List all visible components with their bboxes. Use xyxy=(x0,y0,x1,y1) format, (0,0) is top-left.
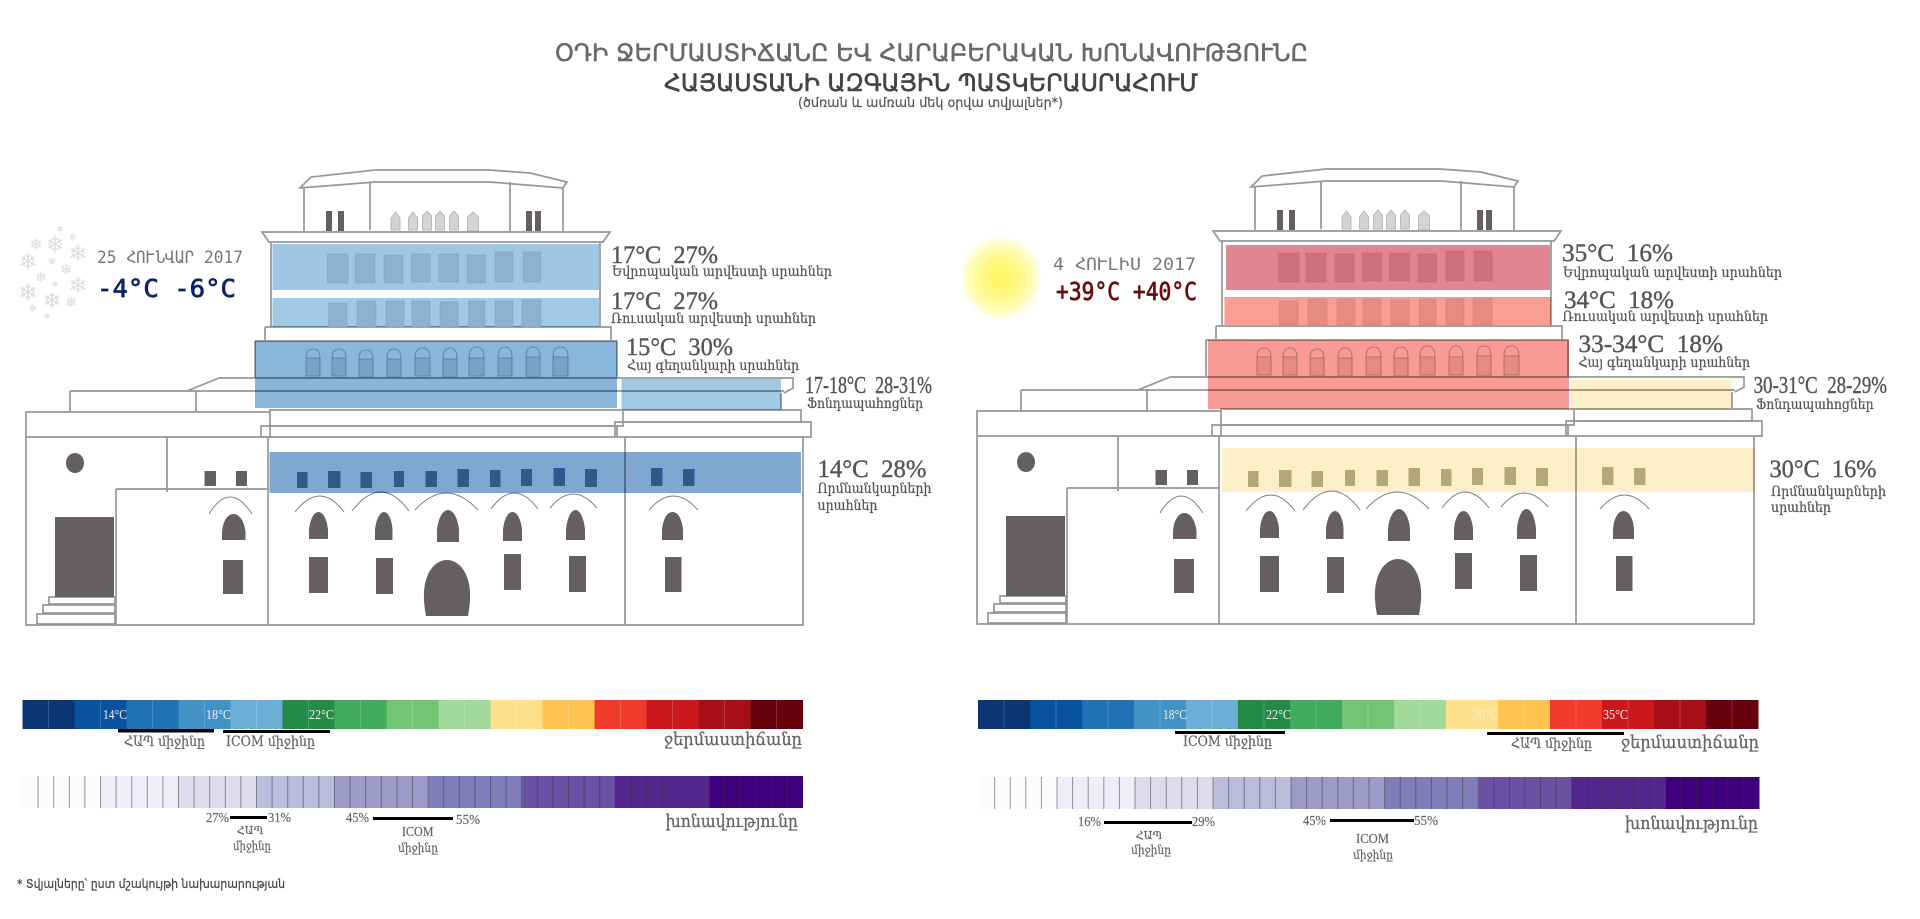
panel: summer temperature scale: 35°C xyxy=(1603,708,1628,723)
panel: summer humidity scale: 29% xyxy=(1192,815,1215,830)
windows: European art halls xyxy=(328,252,541,283)
windows: frescoes halls xyxy=(1248,467,1646,487)
label: frescoes: 30°C 16% xyxy=(1770,456,1876,483)
winter labels: Հայ գեղանկարի սրահներ xyxy=(627,358,799,374)
summer labels xyxy=(1562,240,1887,516)
scale tick labels: 14°C xyxy=(103,708,127,723)
title line 2: ՀԱՅԱՍՏԱՆԻ ԱԶԳԱՅԻՆ ՊԱՏԿԵՐԱՍՐԱՀՈՒՄ xyxy=(664,69,1198,97)
scale title: ջերմաստիճանը xyxy=(1621,732,1759,753)
windows: Russian art halls xyxy=(1280,298,1492,325)
panel: summer humidity scale xyxy=(979,777,1760,862)
panel: summer humidity scale: միջինը xyxy=(1353,848,1393,862)
panel: summer humidity scale: 55% xyxy=(1414,814,1438,829)
panel: summer temperature scale: 30°C xyxy=(1473,708,1498,723)
panel: winter humidity scale: միջինը xyxy=(233,839,271,853)
panel: winter temperature scale: 18°C xyxy=(206,708,231,723)
band: Russian art halls xyxy=(272,298,599,327)
summer labels: սրահներ xyxy=(1771,500,1831,516)
building facade outline xyxy=(26,170,811,625)
label: frescoes: 14°C 28% xyxy=(818,456,926,483)
panel: summer building xyxy=(977,169,1762,624)
band: European art halls xyxy=(1226,245,1550,290)
panel: winter temperature scale xyxy=(22,700,803,750)
windows: Russian art halls xyxy=(328,300,541,327)
panel: winter humidity scale: միջինը xyxy=(398,841,438,855)
label: European art: 35°C 16% xyxy=(1562,240,1673,267)
icon: snowflakes xyxy=(20,226,85,320)
range labels: ICOM միջինը xyxy=(1183,734,1272,750)
panel: summer temperature scale: 22°C xyxy=(1266,708,1291,723)
label: Armenian painting: 33-34°C 18% xyxy=(1578,331,1723,358)
label: Armenian painting: 15°C 30% xyxy=(626,334,733,361)
panel: winter temperature scale: ICOM միջինը xyxy=(226,734,315,750)
band: Russian art halls xyxy=(1224,297,1551,325)
summer labels: Եվրոպական արվեստի սրահներ xyxy=(1563,265,1782,281)
winter labels xyxy=(611,242,932,514)
subtitle: (ծմռան և ամռան մեկ օրվա տվյալներ*) xyxy=(798,95,1063,111)
label: Russian art: 17°C 27% xyxy=(611,288,718,315)
scale title: խոնավությունը xyxy=(1625,813,1758,834)
temperature colour bar xyxy=(978,700,1758,729)
band: storage xyxy=(1571,380,1732,409)
scale title: խոնավությունը xyxy=(666,811,798,832)
ICOM range: 45% xyxy=(346,811,369,826)
panel: summer humidity scale: ՀԱՊ xyxy=(1136,829,1163,842)
title line 1: ՕԴԻ ՋԵՐՄԱՍՏԻՃԱՆԸ ԵՎ ՀԱՐԱԲԵՐԱԿԱՆ ԽՈՆԱՎՈՒԹՅՈՒՆԸ xyxy=(555,39,1308,67)
winter labels: Ֆոնդապահոցներ xyxy=(807,396,923,412)
label: storage: 30-31°C 28-29% xyxy=(1754,373,1887,399)
summer labels: Որմնանկարների xyxy=(1771,484,1886,500)
winter labels: Որմնանկարների xyxy=(818,481,932,497)
windows: frescoes halls xyxy=(297,468,694,488)
windows: European art halls xyxy=(1278,251,1492,282)
icon: sun xyxy=(961,237,1041,319)
summer date: 4 ՀՈՒԼԻՍ 2017 xyxy=(1053,255,1196,275)
panel: winter humidity scale: ՀԱՊ xyxy=(237,824,264,837)
winter outdoor temperature: -4°C -6°C xyxy=(97,274,236,303)
summer labels: Ֆոնդապահոցներ xyxy=(1756,397,1874,413)
scale tick labels: 18°C xyxy=(1163,708,1187,723)
museum range: 16% xyxy=(1078,815,1101,830)
humidity colour bar xyxy=(979,777,1760,809)
panel: summer temperature scale: ՀԱՊ միջինը xyxy=(1511,736,1592,752)
winter date: 25 ՀՈՒՆՎԱՐ 2017 xyxy=(97,248,243,268)
winter labels: Ռուսական արվեստի սրահներ xyxy=(611,311,816,327)
label: Russian art: 34°C 18% xyxy=(1564,287,1674,314)
panel: winter humidity scale: 31% xyxy=(268,811,291,826)
label: European art: 17°C 27% xyxy=(611,242,718,269)
panel: summer temperature scale xyxy=(978,700,1759,753)
summer outdoor temperature: +39°C +40°C xyxy=(1056,277,1197,306)
range bars xyxy=(1175,731,1285,734)
footnote: * Տվյալները՝ ըստ մշակույթի նախարարության xyxy=(17,876,285,891)
humidity colour bar xyxy=(22,776,803,808)
title xyxy=(555,39,1308,111)
scale title: ջերմաստիճանը xyxy=(664,729,802,750)
band: frescoes halls xyxy=(270,452,801,493)
range bars xyxy=(118,729,214,732)
summer labels: Հայ գեղանկարի սրահներ xyxy=(1578,355,1750,371)
winter labels: Եվրոպական արվեստի սրահներ xyxy=(612,264,832,280)
label: storage: 17-18°C 28-31% xyxy=(805,373,932,399)
winter labels: սրահներ xyxy=(818,498,878,514)
windows: Armenian painting halls xyxy=(306,347,568,377)
windows: Armenian painting halls xyxy=(1257,346,1519,376)
panel: summer humidity scale: միջինը xyxy=(1131,843,1171,857)
building facade outline xyxy=(977,169,1762,624)
panel: winter building xyxy=(26,170,811,625)
panel: winter humidity scale: 55% xyxy=(456,813,480,828)
band: Armenian painting halls xyxy=(1208,340,1569,409)
band: frescoes halls xyxy=(1222,448,1755,492)
panel: summer humidity scale: ICOM xyxy=(1356,832,1389,847)
ICOM range: 45% xyxy=(1303,814,1326,829)
temperature colour bar xyxy=(22,700,803,729)
museum range: 27% xyxy=(206,811,229,826)
panel: winter humidity scale: ICOM xyxy=(402,825,434,840)
panel: winter temperature scale: 22°C xyxy=(309,708,334,723)
band: Armenian painting halls xyxy=(255,341,617,408)
band: European art halls xyxy=(272,244,599,290)
panel: winter humidity scale xyxy=(22,776,803,855)
summer labels: Ռուսական արվեստի սրահներ xyxy=(1562,309,1768,325)
band: storage xyxy=(622,379,781,410)
range labels: ՀԱՊ միջինը xyxy=(124,734,205,750)
